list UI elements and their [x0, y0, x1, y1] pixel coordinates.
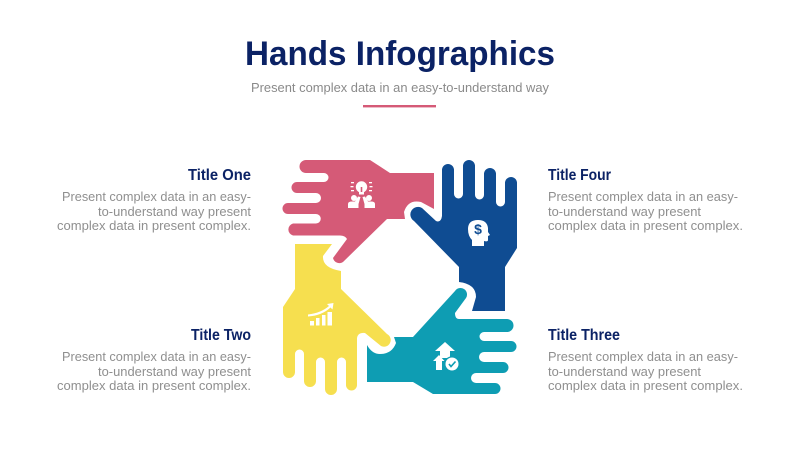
text block: title three: complex data in present complex.: [548, 379, 743, 393]
text block: title four: [548, 167, 743, 233]
hand: yellow: [283, 244, 391, 395]
text block: title three: Title Three: [548, 327, 620, 344]
text block: title one: Title One: [188, 167, 251, 184]
text block: title three: to-understand way present: [548, 365, 702, 379]
text block: title one: complex data in present complex.: [57, 219, 251, 233]
hand: blue: [410, 160, 517, 311]
text block: title two: Present complex data in an easy-: [62, 350, 251, 364]
text block: title two: Title Two: [191, 327, 251, 344]
text block: title three: Present complex data in an easy-: [548, 350, 738, 364]
icon: head with dollar: $: [474, 221, 482, 237]
icon: head with dollar: [468, 220, 490, 246]
text block: title two: complex data in present complex.: [57, 379, 251, 393]
icon: rising bar chart: [308, 303, 334, 326]
subtitle: Present complex data in an easy-to-understand way: [251, 80, 549, 95]
hand: teal: [367, 288, 516, 394]
text block: title one: Present complex data in an easy-: [62, 190, 251, 204]
icon: arrows and check badge: [433, 342, 460, 372]
text block: title one: [57, 167, 252, 233]
text block: title two: [57, 327, 252, 393]
text block: title four: Title Four: [548, 167, 611, 184]
text block: title three: [548, 327, 743, 393]
icon: lightbulb and people: [348, 181, 375, 208]
text block: title one: to-understand way present: [98, 205, 252, 219]
hand: pink: [283, 160, 434, 263]
text block: title two: to-understand way present: [98, 365, 252, 379]
title: Hands Infographics: [245, 35, 555, 73]
title underline: [363, 105, 436, 107]
text block: title four: complex data in present complex.: [548, 219, 743, 233]
text block: title four: to-understand way present: [548, 205, 702, 219]
text block: title four: Present complex data in an easy-: [548, 190, 738, 204]
